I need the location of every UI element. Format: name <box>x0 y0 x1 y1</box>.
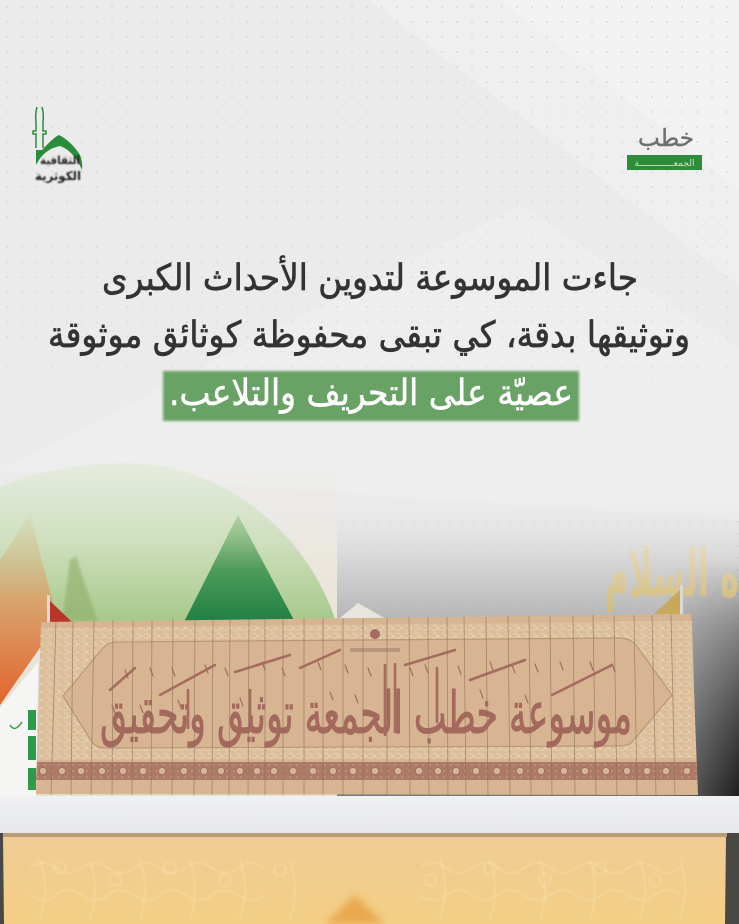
line 2: وتوثيقها بدقة، كي تبقى محفوظة كوثائق موثوقة <box>48 315 690 356</box>
series title: خطب <box>638 124 694 152</box>
small flags <box>47 585 683 625</box>
logo calligraphy: الكوثرية <box>35 169 81 184</box>
shelf <box>0 796 739 924</box>
orange flag fold <box>0 515 58 705</box>
green circle <box>0 463 336 622</box>
logo <box>33 107 82 184</box>
book set <box>36 614 698 795</box>
line 1: جاءت الموسوعة لتدوين الأحداث الكبرى <box>102 255 638 299</box>
gold panel <box>3 837 726 924</box>
background <box>6 6 728 382</box>
floral ornament <box>30 860 685 920</box>
minaret <box>33 107 46 148</box>
green triangle <box>184 515 295 622</box>
calligraphy title <box>100 650 632 748</box>
cartouche <box>63 638 672 748</box>
series badge <box>627 124 702 170</box>
bar label: الجمعـــــــــــــة <box>634 159 694 169</box>
lower band with volume numbers <box>36 762 697 780</box>
highlight box <box>163 371 579 421</box>
dome <box>36 135 82 170</box>
green bar <box>627 155 702 170</box>
logo calligraphy: الثقافية <box>40 154 80 167</box>
logo calligraphy <box>35 154 81 184</box>
line 3: عصيّة على التحريف والتلاعب. <box>169 373 573 414</box>
Iraqi flag <box>0 662 38 796</box>
grey wall <box>337 495 739 800</box>
main statement <box>48 255 690 421</box>
spine lines <box>51 615 675 795</box>
standing shadow <box>62 556 98 622</box>
publisher emblem <box>350 629 400 652</box>
photo backdrop <box>0 460 739 800</box>
book covers <box>36 614 698 795</box>
central point <box>325 895 385 924</box>
